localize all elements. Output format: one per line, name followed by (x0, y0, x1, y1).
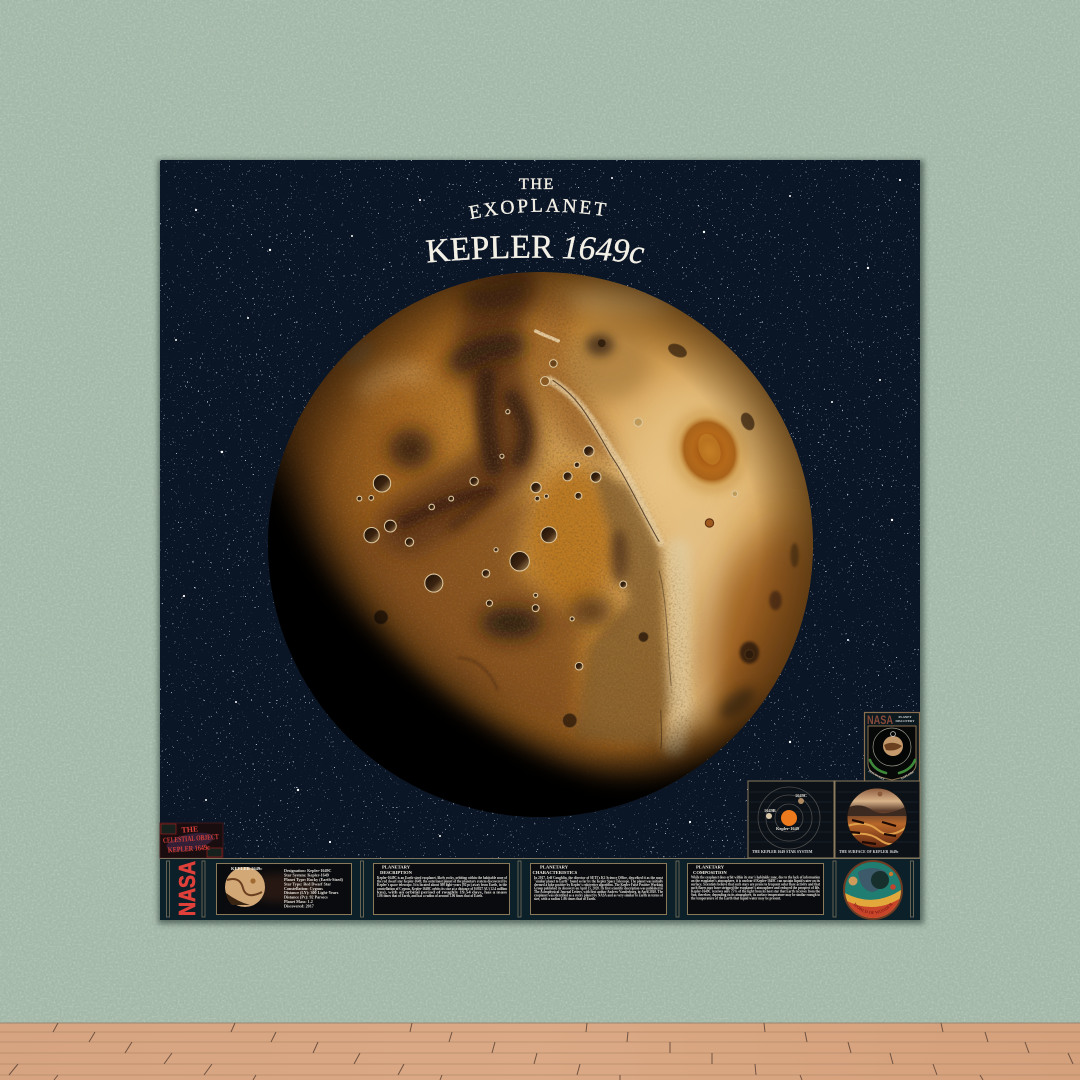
bottom information strip (160, 858, 920, 920)
mission badge (864, 712, 920, 782)
mission badge: EXPLORE (900, 770, 915, 780)
planet facts list: Designation: Kepler-1649C (284, 868, 332, 873)
central brown lowland (344, 494, 581, 731)
night side shadow (268, 439, 764, 817)
orange-brown upper highland (532, 282, 619, 467)
pale plains (557, 282, 762, 734)
panel: planetary composition: While the exoplanet does orbit within its star's habitable zone, due to the lack of information (691, 876, 820, 880)
badge header: PLANET (899, 715, 912, 719)
panel: Kepler 1649 star system: 1649B (764, 808, 776, 813)
planet facts list: Distance (LY): 300 Light-Years (284, 890, 339, 895)
badge laurel (870, 760, 915, 773)
planet facts list: Discovered: 2017 (284, 903, 314, 908)
dark blotches (339, 334, 799, 724)
planet facts list: Planet Mass: 1.2 (284, 899, 313, 904)
panel: planetary composition: Sun, therefore, depending on its atmosphere, its surface temperature may be similar enough to (691, 893, 820, 897)
badge planet (883, 736, 903, 756)
panel: planetary characteristics: In 2017, Jeff Coughlin, the director of SETI's K2 Science Office, described it as the most (534, 876, 664, 880)
wooden floor (0, 1023, 1080, 1080)
badge shield (868, 726, 916, 780)
orange pool (529, 463, 619, 609)
title (426, 176, 644, 264)
title line: KEPLER 1649c: KEPLER 1649c (426, 236, 644, 264)
panel: planetary composition (688, 864, 824, 914)
panel: Kepler 1649 star system (748, 781, 834, 858)
panel: Kepler 1649c facts (216, 864, 352, 914)
surface landscape (846, 788, 908, 848)
panel: planetary description: Kepler's space telescope. It is located about 300 light-years (92 pc) away from Earth, in the (377, 883, 507, 887)
panel: planetary characteristics: The Astrophysical Journal Letters, with first author Andrew Vanderburg, in April 2020. The (534, 890, 663, 894)
panel: planetary characteristics (530, 864, 666, 914)
facts panel planet (225, 867, 265, 907)
round emblem: WORLD OF WONDER (854, 902, 893, 914)
panel: planetary description: DESCRIPTION (380, 870, 413, 875)
panel: planetary characteristics: PLANETARY (540, 864, 569, 870)
panel: planetary composition: the temperature of the Earth that liquid water may be present. (691, 896, 781, 900)
planet facts list: Star Type: Red Dwarf Star (284, 881, 331, 886)
rough brown band beside ridge (574, 467, 675, 745)
panel: planetary description: PLANETARY (382, 864, 411, 870)
panel: Kepler 1649 star system: 1649C (795, 793, 807, 798)
planet facts list: Constellation: Cygnus (284, 886, 323, 891)
panel: planetary composition: on the exoplanet's atmosphere, it is unclear if Kepler-1649C can sustain liquid water on its (691, 879, 821, 883)
poster drop shadow (158, 160, 924, 924)
badge header: NASA (867, 713, 893, 727)
dark rift (404, 286, 526, 526)
panel: Kepler 1649 star system: Kepler-1649 (776, 826, 800, 831)
planet Kepler 1649c (268, 272, 813, 817)
celestial object plaque: KEPLER 1649c (168, 843, 211, 855)
craters (357, 360, 738, 670)
celestial object plaque: CELESTIAL OBJECT (163, 832, 219, 845)
light ridge (365, 331, 680, 748)
starfield background (160, 160, 920, 920)
surface caption: THE SURFACE OF KEPLER 1649c (839, 850, 899, 854)
shadowed craters (374, 339, 757, 727)
panel: planetary characteristics: size, with a radius 1.06 times that of Earth. (534, 897, 596, 901)
planet 1649b (766, 813, 772, 819)
panel: planetary composition: COMPOSITION (693, 870, 727, 875)
badge header: DISCOVERY (895, 719, 915, 723)
planet facts list: Planet Type: Rocky (Earth-Sized) (284, 877, 343, 882)
title line: THE: THE (519, 176, 555, 193)
panel: planetary description (374, 864, 510, 914)
surface noise texture on rough terrain (288, 280, 700, 764)
panel: planetary characteristics: exoplanet was identified as a rocky planet by NASA and as very similar to Earth in terms of (534, 894, 664, 898)
panel: planetary composition: surface. Scientists believe that such stars are prone to frequent solar flare activity and that (691, 882, 821, 886)
panel: planetary description: constellation of Cygnus. Kepler-1649C orbits its star at a distance of 0.0827 AU (12.4 million (377, 887, 507, 891)
round emblem (843, 860, 903, 920)
star Kepler-1649 (781, 810, 797, 826)
orbit rings (758, 787, 820, 849)
panel: planetary description: 1.06 times that of Earth, and has a radius of around 1.06 times that of Earth. (377, 894, 483, 898)
celestial object plaque: THE (181, 824, 199, 835)
panel: planetary composition: such flares may have stripped the exoplanet's atmosphere and reduced the prospect of life. (691, 886, 820, 890)
mission badge: DISCOVERY (868, 769, 886, 782)
poster (160, 160, 920, 920)
panel: Kepler 1649c facts: KEPLER 1649c (231, 866, 262, 871)
planet edge darkening (268, 272, 813, 817)
panel: planetary characteristics: "similar planet to Earth" found so far by the Kepler Space Telescope. The planet was initially (534, 880, 663, 884)
NASA logo: NASA (174, 861, 200, 916)
ornamental column dividers (166, 861, 914, 917)
star system caption: THE KEPLER 1649 STAR SYSTEM (752, 850, 813, 854)
panel: planetary characteristics: CHARACTERISTICS (532, 870, 578, 875)
planet base sphere (268, 272, 813, 817)
panel: surface of Kepler 1649c (835, 781, 920, 858)
panel: planetary characteristics: Group published its discovery on April 15, 2020. Its first scientific description was published in (534, 886, 663, 890)
panel: planetary characteristics: deemed a false positive by Kepler's robovetter algorithm. The Kepler False Positive Working (534, 883, 663, 887)
title line: EXOPLANET: EXOPLANET (468, 198, 607, 220)
panel: planetary composition: PLANETARY (696, 864, 725, 870)
planet facts list: Star System: Kepler-1649 (284, 873, 329, 878)
panel: planetary composition: Kepler-1649C receives only 75% of the light from its host star that Earth receives from the (691, 890, 820, 894)
panel: planetary description: Kepler-1649C is an Earth-sized exoplanet, likely rocky, orbiting within the habitable zone of (377, 876, 508, 880)
panel: planetary description: km), with an orbital period of roughly 19.54 days, has a mass (377, 890, 508, 894)
large oval storm spot (668, 406, 750, 496)
planet facts list: Distance (Pc): 92 Parsecs (284, 895, 328, 900)
celestial object plaque (160, 823, 223, 858)
planet facts list (284, 868, 343, 908)
tan haze at upper right (567, 324, 650, 401)
lower right brown highland (691, 507, 813, 720)
planet 1649c (798, 798, 804, 804)
panel: planetary description: the red dwarf star Kepler-1649, the outermost planet of the planetary system discovered by (377, 880, 507, 884)
